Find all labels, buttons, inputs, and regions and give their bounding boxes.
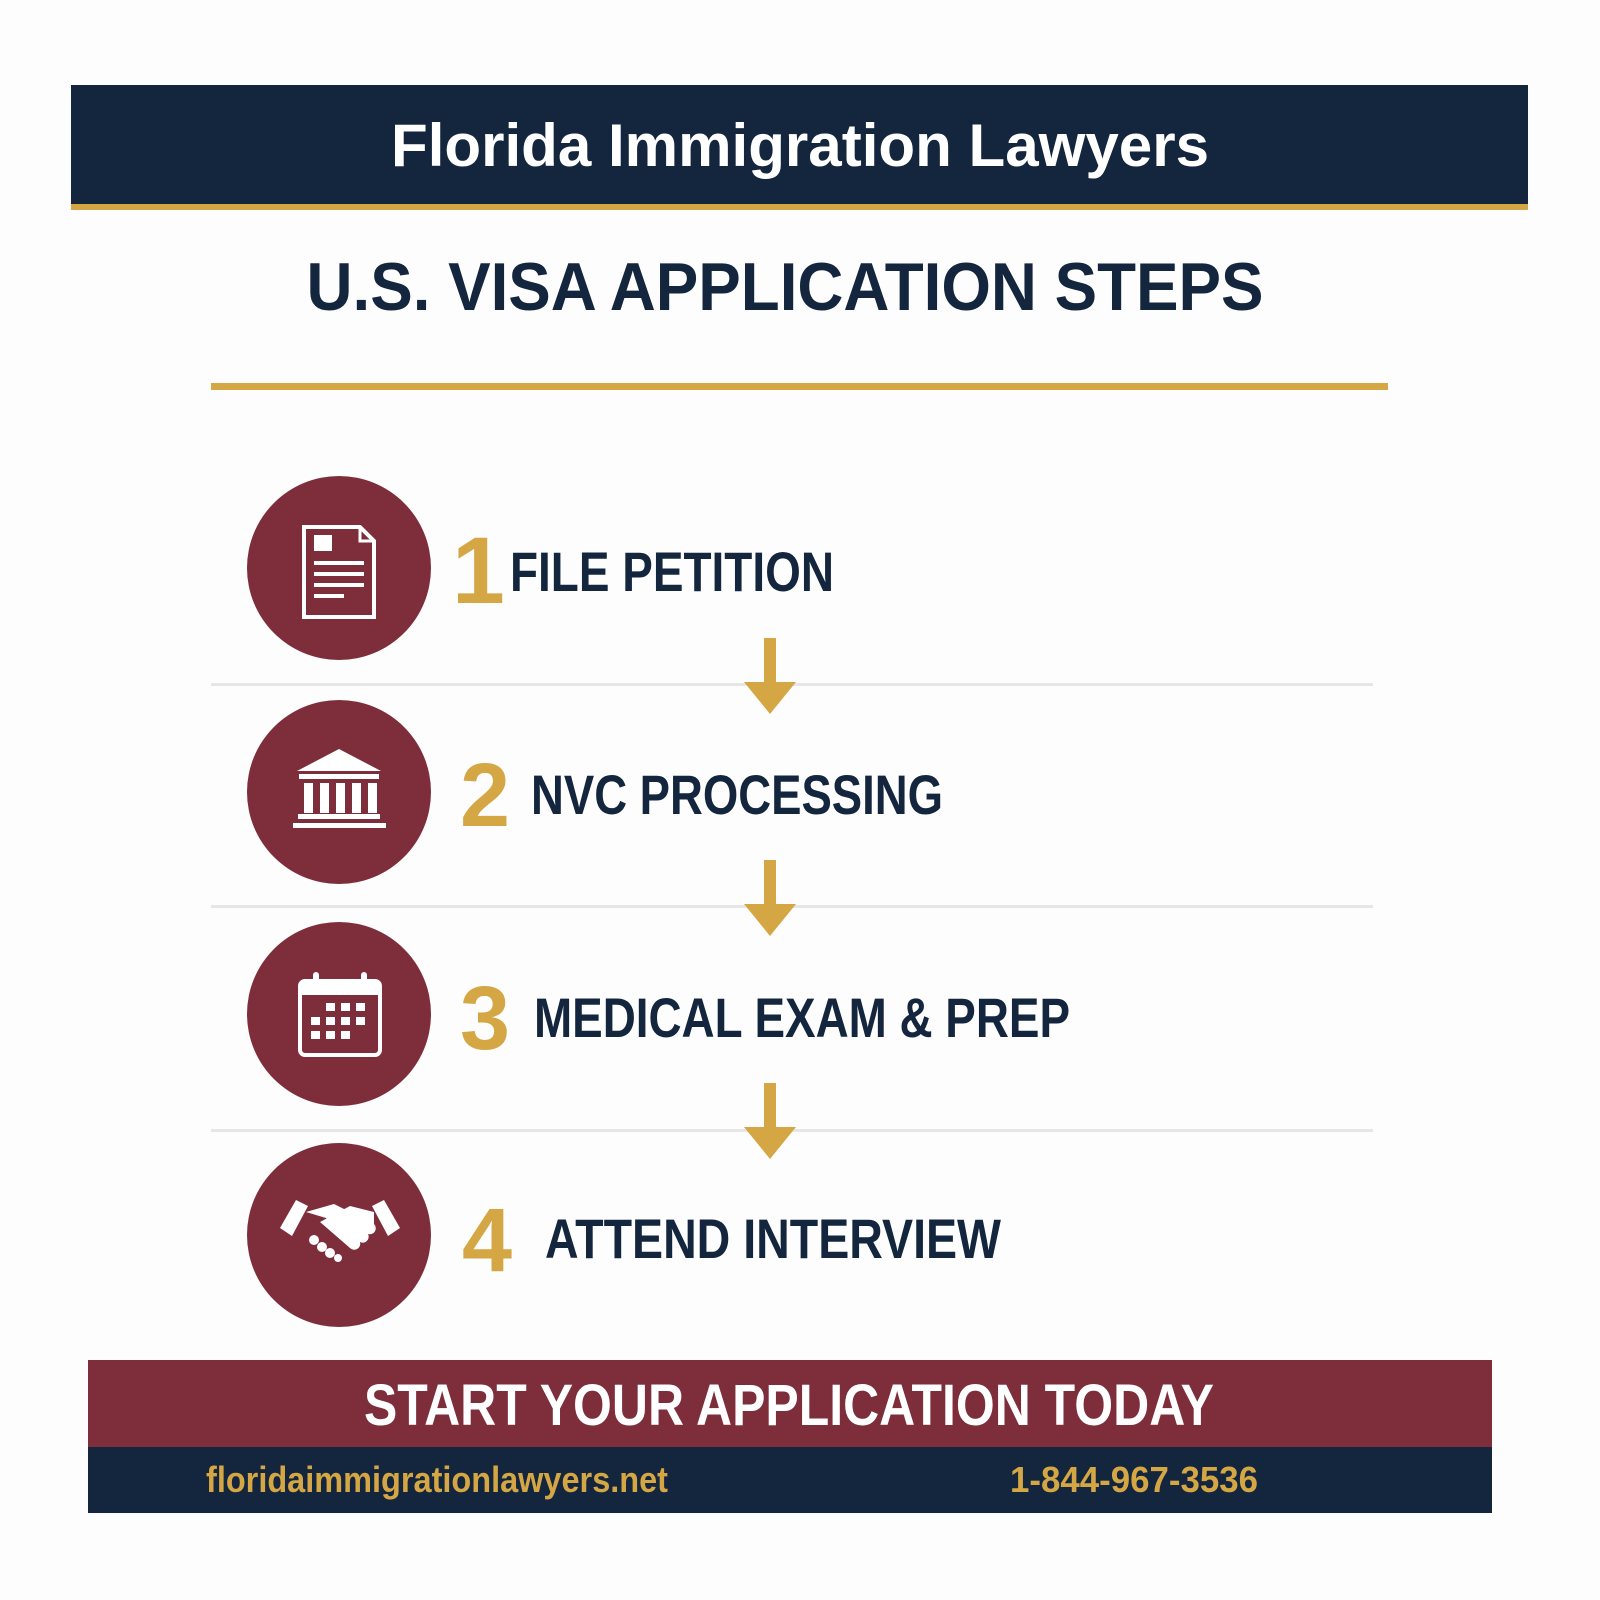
icon: handshake [247,1143,431,1327]
step 1 [247,476,834,660]
header title: Florida Immigration Lawyers [391,112,1209,179]
step 3 [247,922,1070,1106]
step 4 [247,1143,1001,1327]
arrow 2 [744,860,796,936]
step 4: ATTEND INTERVIEW [545,1207,1001,1270]
icon: document [247,476,431,660]
footer banner [88,1360,1492,1513]
step 2: 2 [460,746,510,846]
arrow 3 [744,1083,796,1159]
step 4: 4 [462,1191,512,1291]
icon: courthouse [247,700,431,884]
step 2 [247,700,943,884]
arrow 1 [744,638,796,714]
call to action: START YOUR APPLICATION TODAY [364,1373,1214,1438]
step 1: 1 [452,518,505,624]
subtitle: U.S. VISA APPLICATION STEPS [306,249,1264,325]
step 2: NVC PROCESSING [531,763,943,826]
step 3: 3 [460,969,510,1069]
icon: calendar [247,922,431,1106]
step 1: FILE PETITION [510,540,834,603]
website: floridaimmigrationlawyers.net [206,1459,668,1500]
gold rule [211,383,1388,390]
phone: 1-844-967-3536 [1010,1459,1258,1500]
dividers [211,683,1373,1132]
step 3: MEDICAL EXAM & PREP [534,986,1070,1049]
header bar [71,85,1528,210]
